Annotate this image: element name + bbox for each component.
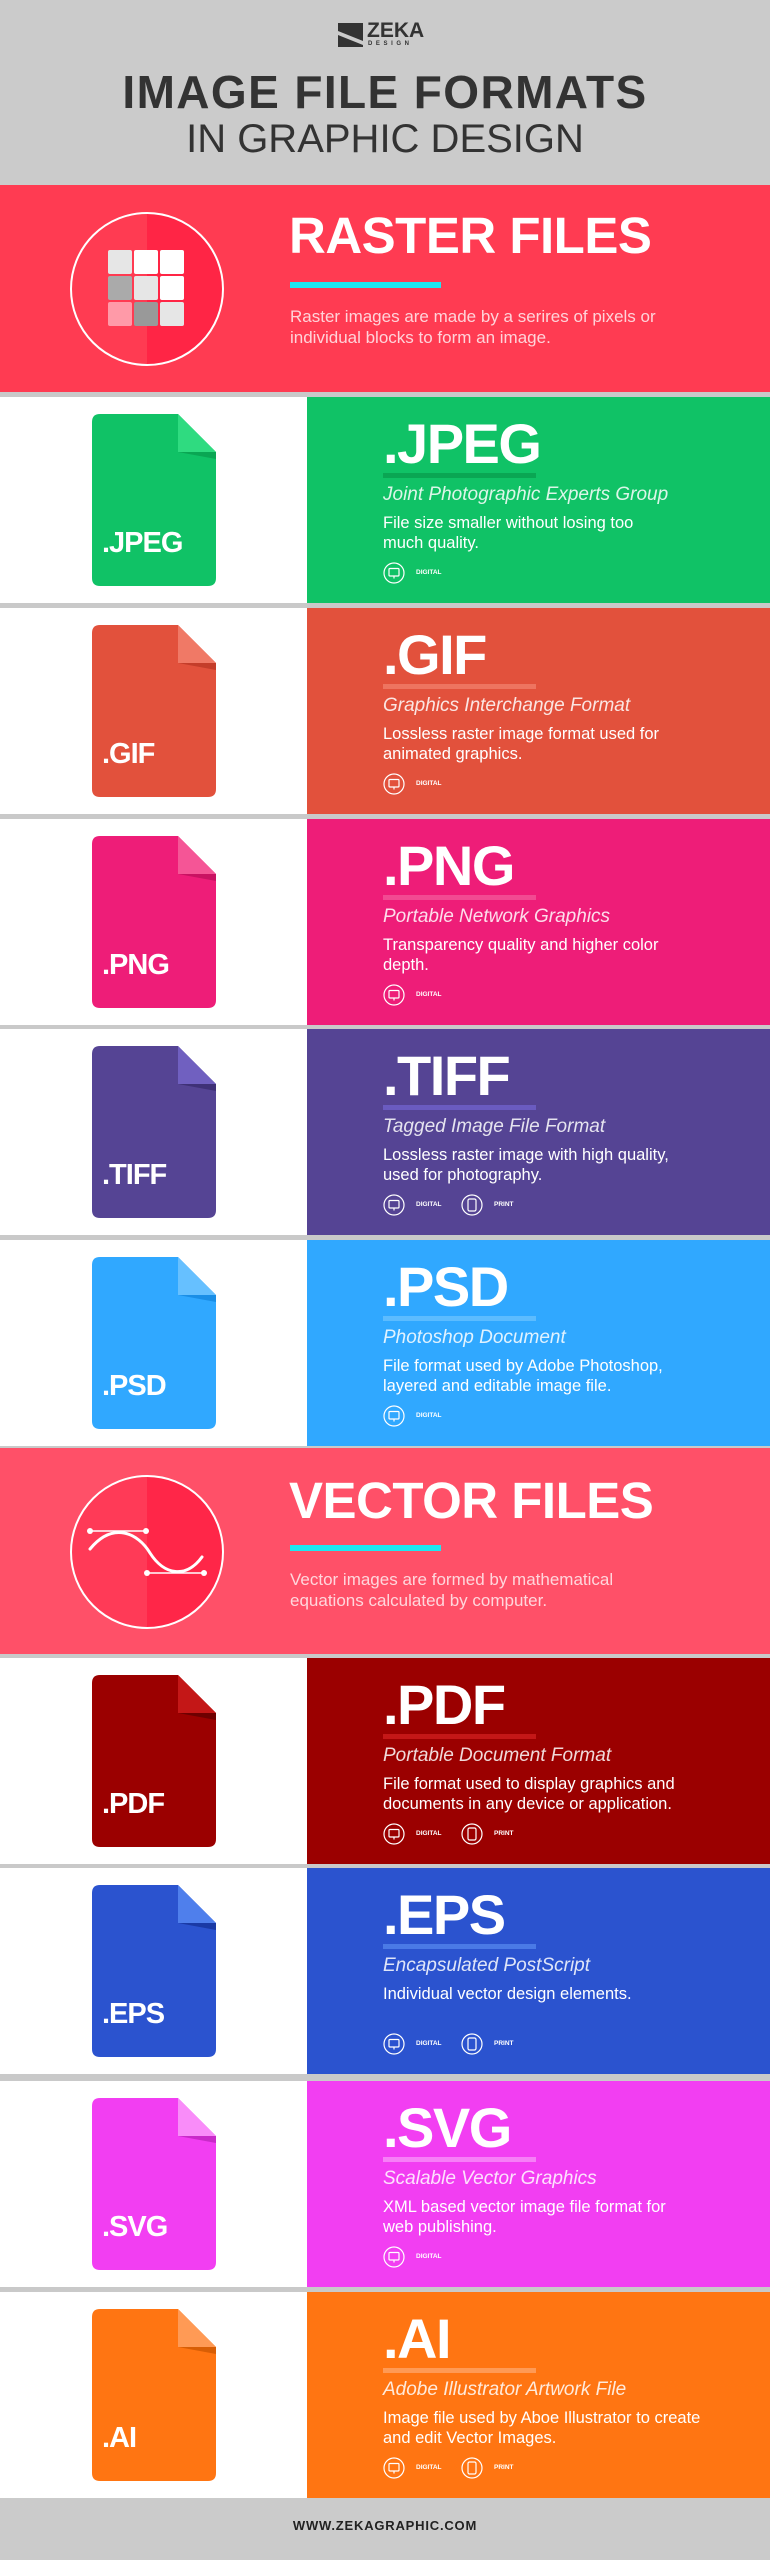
row: PNG: .PNG (102, 949, 169, 981)
panel: PNG info: DIGITAL (416, 991, 442, 998)
row: PDF (0, 1658, 770, 1864)
row: GIF: .GIF (102, 738, 154, 770)
text: vector description: Vector images are formed by mathematical (290, 1570, 613, 1589)
panel: AI info: PRINT (494, 2464, 514, 2471)
logo: ZEKA (367, 19, 424, 42)
footer url: WWW.ZEKAGRAPHIC.COM (293, 2518, 477, 2533)
icon: JPEG file (92, 414, 216, 586)
icon: PDF file (92, 1675, 216, 1847)
heading: vector files: VECTOR FILES (289, 1472, 653, 1529)
row: EPS (0, 1868, 770, 2074)
panel: PDF info: documents in any device or application. (383, 1795, 672, 1813)
panel: TIFF info: DIGITAL (416, 1201, 442, 1208)
logo: DESIGN (368, 41, 413, 47)
panel: AI info: .AI (383, 2307, 450, 2370)
subtitle: IN GRAPHIC DESIGN (186, 117, 584, 161)
panel: PDF info: Portable Document Format (383, 1745, 611, 1766)
panel: AI info: Image file used by Aboe Illustrator to create (383, 2409, 700, 2427)
panel: PDF info: PRINT (494, 1830, 514, 1837)
panel: EPS info: Encapsulated PostScript (383, 1955, 590, 1976)
panel: GIF info: animated graphics. (383, 745, 522, 763)
row: TIFF (0, 1029, 770, 1235)
text: raster description: Raster images are made by a serires of pixels or (290, 307, 656, 326)
panel: PNG info: Portable Network Graphics (383, 906, 610, 927)
text: raster description: individual blocks to form an image. (290, 328, 551, 347)
icon: PNG file (92, 836, 216, 1008)
panel: PSD info: Photoshop Document (383, 1327, 566, 1348)
panel: GIF info: DIGITAL (416, 780, 442, 787)
row: PNG (0, 819, 770, 1025)
panel: PSD info: .PSD (383, 1255, 508, 1318)
footer (0, 2498, 770, 2560)
panel: EPS info: Individual vector design elements. (383, 1985, 632, 2003)
panel: GIF info: Graphics Interchange Format (383, 695, 630, 716)
panel: PDF info: DIGITAL (416, 1830, 442, 1837)
row: AI: .AI (102, 2422, 136, 2454)
row: SVG (0, 2081, 770, 2287)
panel: PSD info: layered and editable image file. (383, 1377, 611, 1395)
panel: PSD info: DIGITAL (416, 1412, 442, 1419)
panel: EPS info: DIGITAL (416, 2040, 442, 2047)
icon: PSD file (92, 1257, 216, 1429)
panel: JPEG info: .JPEG (383, 412, 540, 475)
panel: AI info: Adobe Illustrator Artwork File (383, 2379, 626, 2400)
panel: PDF info (307, 1658, 770, 1864)
panel: PSD info: File format used by Adobe Photoshop, (383, 1357, 663, 1375)
row: JPEG (0, 397, 770, 603)
panel: TIFF info: Tagged Image File Format (383, 1116, 605, 1137)
row: PDF: .PDF (102, 1788, 164, 1820)
row: JPEG: .JPEG (102, 527, 182, 559)
icon: bezier curve (70, 1475, 224, 1629)
panel: PNG info: Transparency quality and higher color (383, 936, 658, 954)
panel: JPEG info (307, 397, 770, 603)
panel: AI info: and edit Vector Images. (383, 2429, 556, 2447)
panel: GIF info: Lossless raster image format used for (383, 725, 659, 743)
panel: JPEG info: Joint Photographic Experts Group (383, 484, 668, 505)
icon: TIFF file (92, 1046, 216, 1218)
row: EPS: .EPS (102, 1998, 164, 2030)
icon: EPS file (92, 1885, 216, 2057)
panel: SVG info (307, 2081, 770, 2287)
text: raster description (290, 307, 656, 347)
row: TIFF: .TIFF (102, 1159, 166, 1191)
panel: AI info: DIGITAL (416, 2464, 442, 2471)
panel: GIF info (307, 608, 770, 814)
panel: SVG info: Scalable Vector Graphics (383, 2168, 597, 2189)
row: GIF (0, 608, 770, 814)
panel: TIFF info: used for photography. (383, 1166, 542, 1184)
panel: JPEG info: much quality. (383, 534, 479, 552)
panel: vector files (0, 1448, 770, 1654)
icon: SVG file (92, 2098, 216, 2270)
panel: SVG info: DIGITAL (416, 2253, 442, 2260)
panel: SVG info: .SVG (383, 2096, 511, 2159)
panel: EPS info: PRINT (494, 2040, 514, 2047)
panel: TIFF info: Lossless raster image with high quality, (383, 1146, 669, 1164)
panel: SVG info: web publishing. (383, 2218, 497, 2236)
panel: TIFF info: .TIFF (383, 1044, 509, 1107)
panel: JPEG info: DIGITAL (416, 569, 442, 576)
panel: EPS info: .EPS (383, 1883, 505, 1946)
row: AI (0, 2292, 770, 2498)
panel: TIFF info: PRINT (494, 1201, 514, 1208)
icon: GIF file (92, 625, 216, 797)
panel: PNG info: depth. (383, 956, 429, 974)
header (0, 0, 770, 185)
heading: raster files: RASTER FILES (289, 207, 651, 264)
row: PSD: .PSD (102, 1370, 166, 1402)
panel: EPS info (307, 1868, 770, 2074)
panel: raster files (0, 185, 770, 392)
icon: AI file (92, 2309, 216, 2481)
panel: PNG info: .PNG (383, 834, 514, 897)
icon: pixel grid (70, 212, 224, 366)
panel: TIFF info (307, 1029, 770, 1235)
title: IMAGE FILE FORMATS (122, 66, 648, 118)
text: vector description (290, 1570, 613, 1610)
panel: JPEG info: File size smaller without losing too (383, 514, 633, 532)
row: PSD (0, 1240, 770, 1446)
logo (338, 19, 424, 47)
panel: PDF info: File format used to display graphics and (383, 1775, 675, 1793)
panel: PDF info: .PDF (383, 1673, 505, 1736)
panel: AI info (307, 2292, 770, 2498)
text: vector description: equations calculated by computer. (290, 1591, 547, 1610)
panel: SVG info: XML based vector image file format for (383, 2198, 666, 2216)
panel: GIF info: .GIF (383, 623, 486, 686)
panel: PSD info (307, 1240, 770, 1446)
panel: PNG info (307, 819, 770, 1025)
row: SVG: .SVG (102, 2211, 167, 2243)
